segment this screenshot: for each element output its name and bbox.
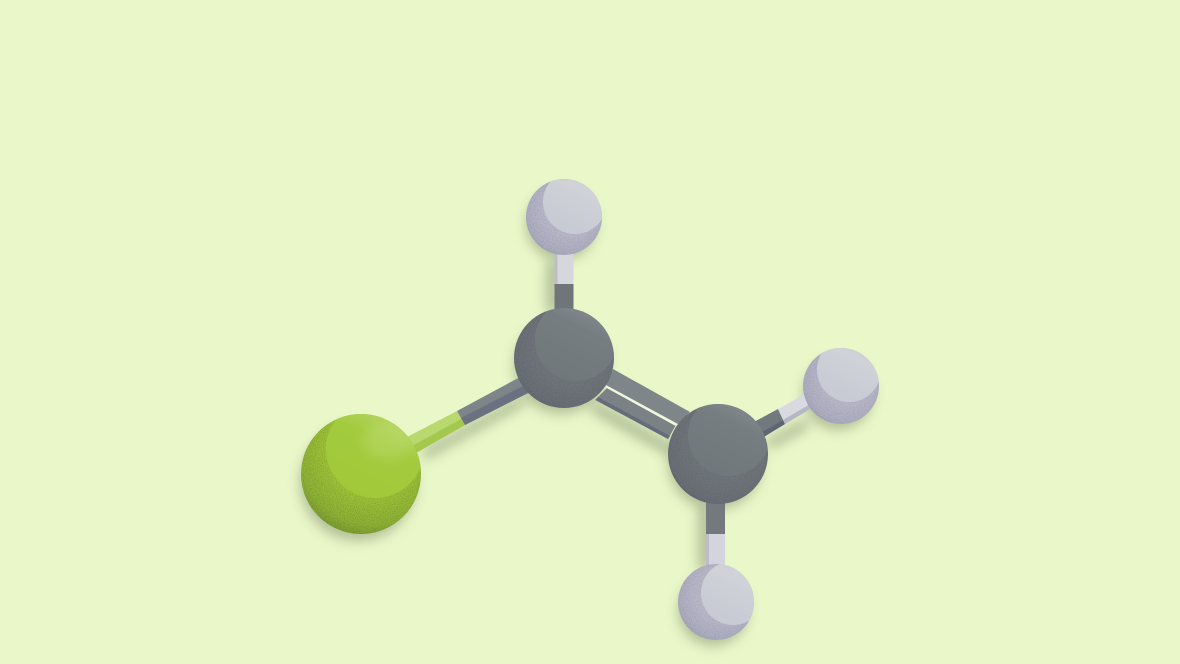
bond: carbon to right hydrogen [752, 390, 812, 438]
drop shadows [300, 190, 873, 646]
atom: central carbon [514, 308, 614, 408]
atom: top hydrogen [526, 179, 602, 255]
bond: carbon to top hydrogen [554, 250, 574, 314]
atom: chlorine [301, 414, 421, 534]
molecule illustration: ball and stick model [294, 179, 879, 652]
atom: lower carbon [668, 404, 768, 504]
double bond between carbons [595, 369, 690, 439]
bond: chlorine to carbon [407, 376, 532, 453]
bond: carbon to bottom hydrogen [706, 495, 725, 569]
atom: right hydrogen [803, 348, 879, 424]
atom: bottom hydrogen [678, 564, 754, 640]
